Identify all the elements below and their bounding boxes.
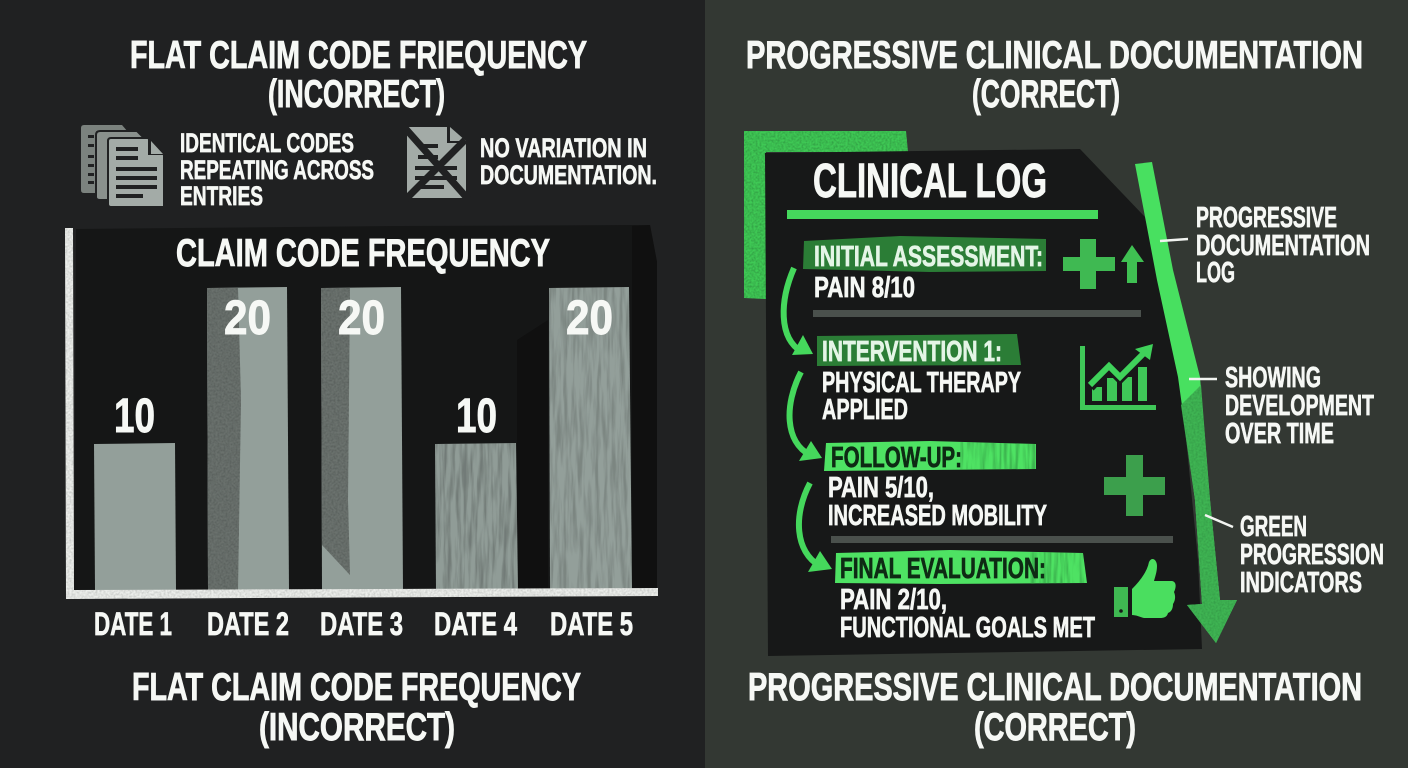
arrow: step 2	[790, 372, 822, 461]
text: identical codes: IDENTICAL CODES	[180, 128, 354, 158]
entry: initial assessment	[803, 236, 1046, 304]
x axis labels: DATE 5	[550, 606, 633, 642]
bar: date 4: 10	[456, 390, 497, 443]
icon: up arrow	[1121, 245, 1144, 283]
arrow: step 3	[799, 483, 832, 572]
callout: green progression: GREEN	[1240, 511, 1307, 543]
x axis labels: DATE 4	[434, 606, 517, 642]
entry: final evaluation: PAIN 2/10,	[840, 584, 947, 616]
callout: showing development: SHOWING	[1225, 362, 1321, 394]
text: no variation: NO VARIATION IN	[480, 133, 647, 163]
title underline	[787, 210, 1098, 219]
bar: date 5	[549, 287, 632, 590]
panel: flat claim code frequency	[65, 34, 658, 749]
callout: progressive documentation log: PROGRESSIVE	[1196, 202, 1337, 234]
chart title: CLAIM CODE FREQUENCY	[176, 232, 550, 275]
icon: plus	[1063, 239, 1115, 289]
text: identical codes: ENTRIES	[180, 181, 263, 211]
heading: flat claim bottom	[132, 666, 581, 749]
panel: correct background	[705, 0, 1408, 768]
entry: final evaluation	[835, 550, 1095, 644]
x axis labels: DATE 3	[320, 606, 403, 642]
entry: intervention: APPLIED	[822, 394, 908, 426]
entry: intervention	[817, 334, 1021, 426]
entry: initial assessment: PAIN 8/10	[814, 272, 915, 304]
entry: follow-up: FOLLOW-UP:	[831, 442, 962, 474]
log title: CLINICAL LOG	[813, 155, 1047, 208]
callout: showing development	[1189, 362, 1374, 450]
bar: date 2	[207, 287, 289, 590]
bar: date 5: 20	[566, 292, 613, 345]
clinical log sheet	[765, 149, 1202, 656]
text: identical codes	[180, 128, 374, 211]
heading: flat claim top: (INCORRECT)	[268, 73, 445, 116]
icon: stacked documents	[81, 125, 164, 207]
callout: showing development: OVER TIME	[1225, 418, 1334, 450]
bar: date 4	[435, 390, 518, 590]
entry: final evaluation: FINAL EVALUATION:	[840, 553, 1046, 585]
bar: date 1: 10	[114, 390, 155, 443]
heading: progressive bottom	[748, 666, 1362, 749]
bar: date 2: 20	[224, 292, 271, 345]
heading: progressive top: (CORRECT)	[972, 73, 1120, 116]
entry: follow-up: INCREASED MOBILITY	[828, 500, 1047, 532]
bar chart: claim code frequency	[65, 225, 658, 642]
icon: thumbs up	[1114, 559, 1176, 618]
text: no variation	[480, 133, 657, 190]
heading: progressive bottom: (CORRECT)	[974, 706, 1136, 749]
x axis labels	[94, 606, 633, 642]
entry: intervention: PHYSICAL THERAPY	[822, 367, 1021, 399]
entry: follow-up	[824, 441, 1047, 532]
entry: follow-up: PAIN 5/10,	[828, 472, 934, 504]
callout: progressive documentation log: LOG	[1196, 257, 1235, 289]
text: identical codes: REPEATING ACROSS	[180, 155, 374, 185]
heading: flat claim top: FLAT CLAIM CODE FRIEQUENCY	[130, 34, 587, 77]
green tape	[744, 131, 908, 299]
callout: progressive documentation log	[1160, 202, 1370, 289]
heading: progressive top	[746, 34, 1363, 116]
entry: intervention: INTERVENTION 1:	[822, 336, 1002, 368]
panel: incorrect background	[0, 0, 705, 768]
icon: crossed out document	[405, 127, 468, 199]
bar: date 1	[94, 390, 176, 590]
icon: growth chart	[1080, 344, 1156, 410]
arrow: step 1	[784, 268, 813, 355]
entry: initial assessment: INITIAL ASSESSMENT:	[814, 241, 1043, 273]
text: no variation: DOCUMENTATION.	[480, 160, 657, 190]
heading: flat claim top	[130, 34, 587, 116]
chart axes	[65, 228, 658, 599]
icon: plus faded	[1104, 455, 1165, 516]
arrow: progression	[1135, 162, 1237, 643]
heading: flat claim bottom: FLAT CLAIM CODE FREQUENCY	[132, 666, 581, 709]
heading: flat claim bottom: (INCORRECT)	[259, 706, 455, 749]
bar: date 3: 20	[338, 292, 385, 345]
entry: final evaluation: FUNCTIONAL GOALS MET	[840, 612, 1095, 644]
x axis labels: DATE 2	[207, 606, 289, 642]
x axis labels: DATE 1	[94, 606, 172, 642]
callout: green progression	[1205, 511, 1384, 599]
bar: date 3	[321, 287, 403, 590]
panel: progressive clinical documentation	[744, 34, 1384, 749]
